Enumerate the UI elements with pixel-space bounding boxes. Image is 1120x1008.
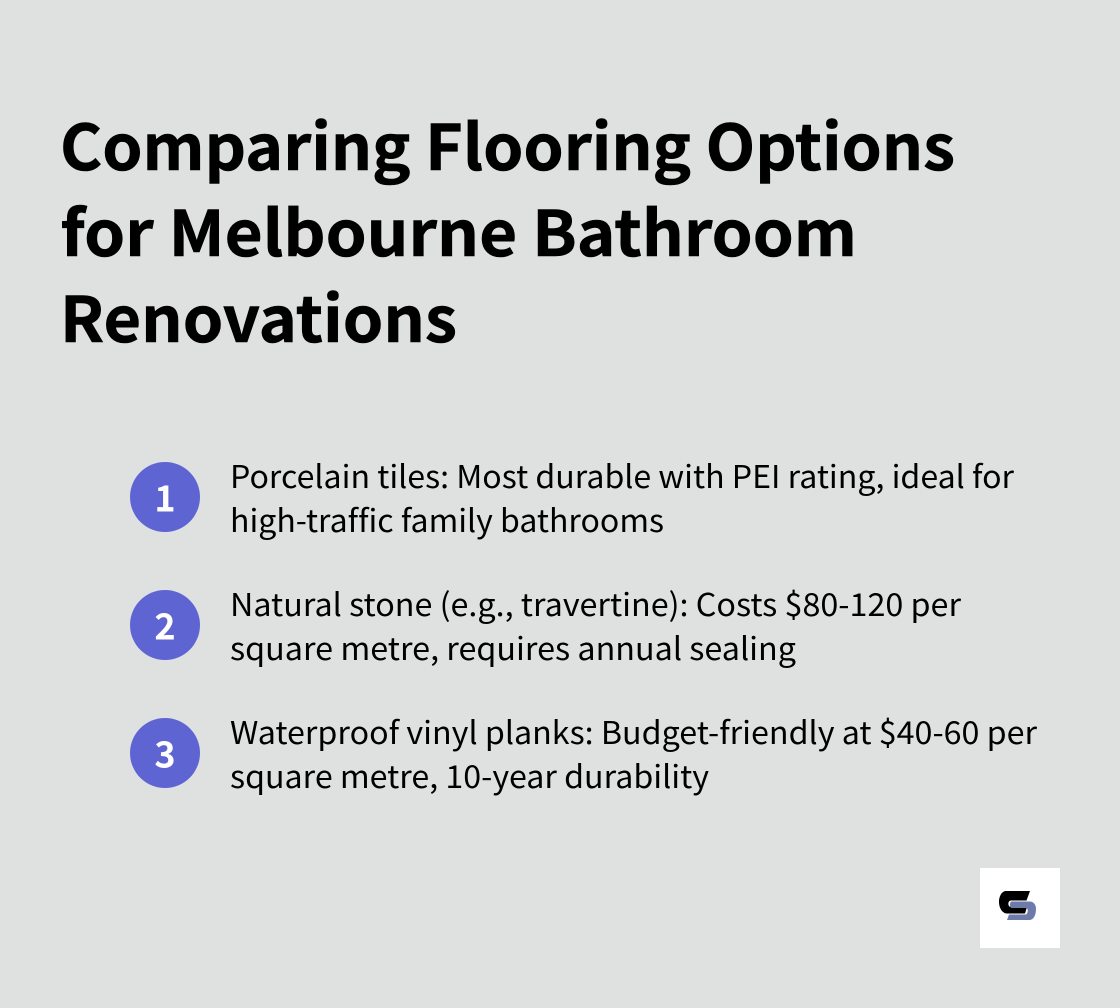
list item 3: waterproof vinyl planks (130, 708, 1038, 798)
number badge 3: 3 (154, 726, 176, 778)
number badge 3 (130, 718, 200, 788)
title: Renovations (60, 270, 457, 361)
number badge 1: 1 (154, 470, 176, 522)
text: waterproof vinyl planks: Waterproof vinyl planks: Budget-friendly at $40-60 per (230, 708, 1038, 754)
title: Comparing Flooring Options (60, 98, 955, 189)
text: waterproof vinyl planks: square metre, 10-year durability (230, 752, 709, 798)
text: porcelain tiles: high-traffic family bathrooms (230, 496, 664, 542)
title: for Melbourne Bathroom (60, 184, 857, 275)
number badge 2 (130, 590, 200, 660)
number badge 1 (130, 462, 200, 532)
list item 2: natural stone (130, 580, 962, 670)
logo badge (980, 868, 1060, 948)
number badge 2: 2 (154, 598, 176, 650)
text: porcelain tiles: Porcelain tiles: Most durable with PEI rating, ideal for (230, 452, 1015, 498)
text: natural stone: square metre, requires annual sealing (230, 624, 796, 670)
text: waterproof vinyl planks (230, 708, 1038, 798)
text: natural stone (230, 580, 962, 670)
text: natural stone: Natural stone (e.g., travertine): Costs $80-120 per (230, 580, 962, 626)
title (60, 98, 955, 361)
list item 1: porcelain tiles (130, 452, 1015, 542)
text: porcelain tiles (230, 452, 1015, 542)
